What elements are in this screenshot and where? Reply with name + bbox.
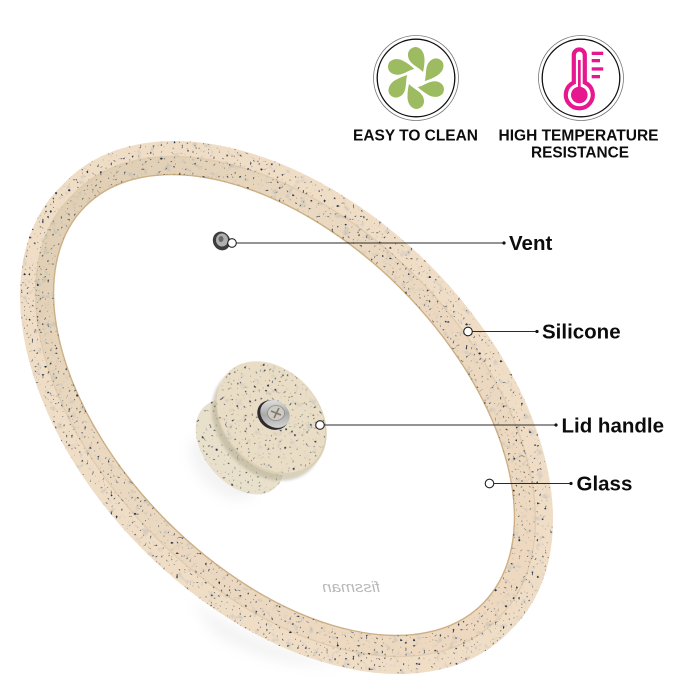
icon: thermometer — [538, 36, 624, 120]
easy to clean label: EASY TO CLEAN — [353, 128, 478, 144]
silicone rim of the lid — [20, 141, 553, 674]
mirrored brand mark on glass: fissman — [320, 579, 382, 596]
rim speckles — [20, 141, 553, 674]
callout: lid handle — [316, 414, 664, 438]
callout: vent — [228, 232, 552, 255]
high temperature resistance label: RESISTANCE — [531, 144, 629, 162]
rim base — [20, 141, 553, 674]
handle screw washer — [251, 394, 295, 436]
callout: vent: Vent — [509, 232, 552, 255]
callout: glass — [485, 472, 632, 496]
vent knob — [210, 229, 233, 253]
handle front disc — [195, 339, 347, 495]
rim ridge line — [36, 157, 535, 656]
rim inner band — [36, 157, 535, 656]
handle front disc edge — [194, 340, 349, 497]
shadow under rim — [190, 600, 340, 666]
lid handle — [178, 339, 349, 512]
handle shadow — [178, 424, 266, 512]
icon: easy to clean pinwheel — [374, 36, 458, 120]
callout: glass: Glass — [576, 472, 632, 496]
high temperature resistance label — [498, 128, 658, 162]
high temperature resistance label: HIGH TEMPERATURE — [498, 128, 658, 144]
rim blotches — [20, 141, 553, 674]
rim inner edge — [54, 175, 514, 635]
handle disc cast shadow — [189, 345, 345, 503]
callout: silicone: Silicone — [542, 320, 621, 344]
handle back disc — [178, 382, 302, 512]
handle screw — [255, 394, 295, 434]
callout: lid handle: Lid handle — [562, 414, 664, 438]
callout: silicone — [464, 320, 621, 344]
